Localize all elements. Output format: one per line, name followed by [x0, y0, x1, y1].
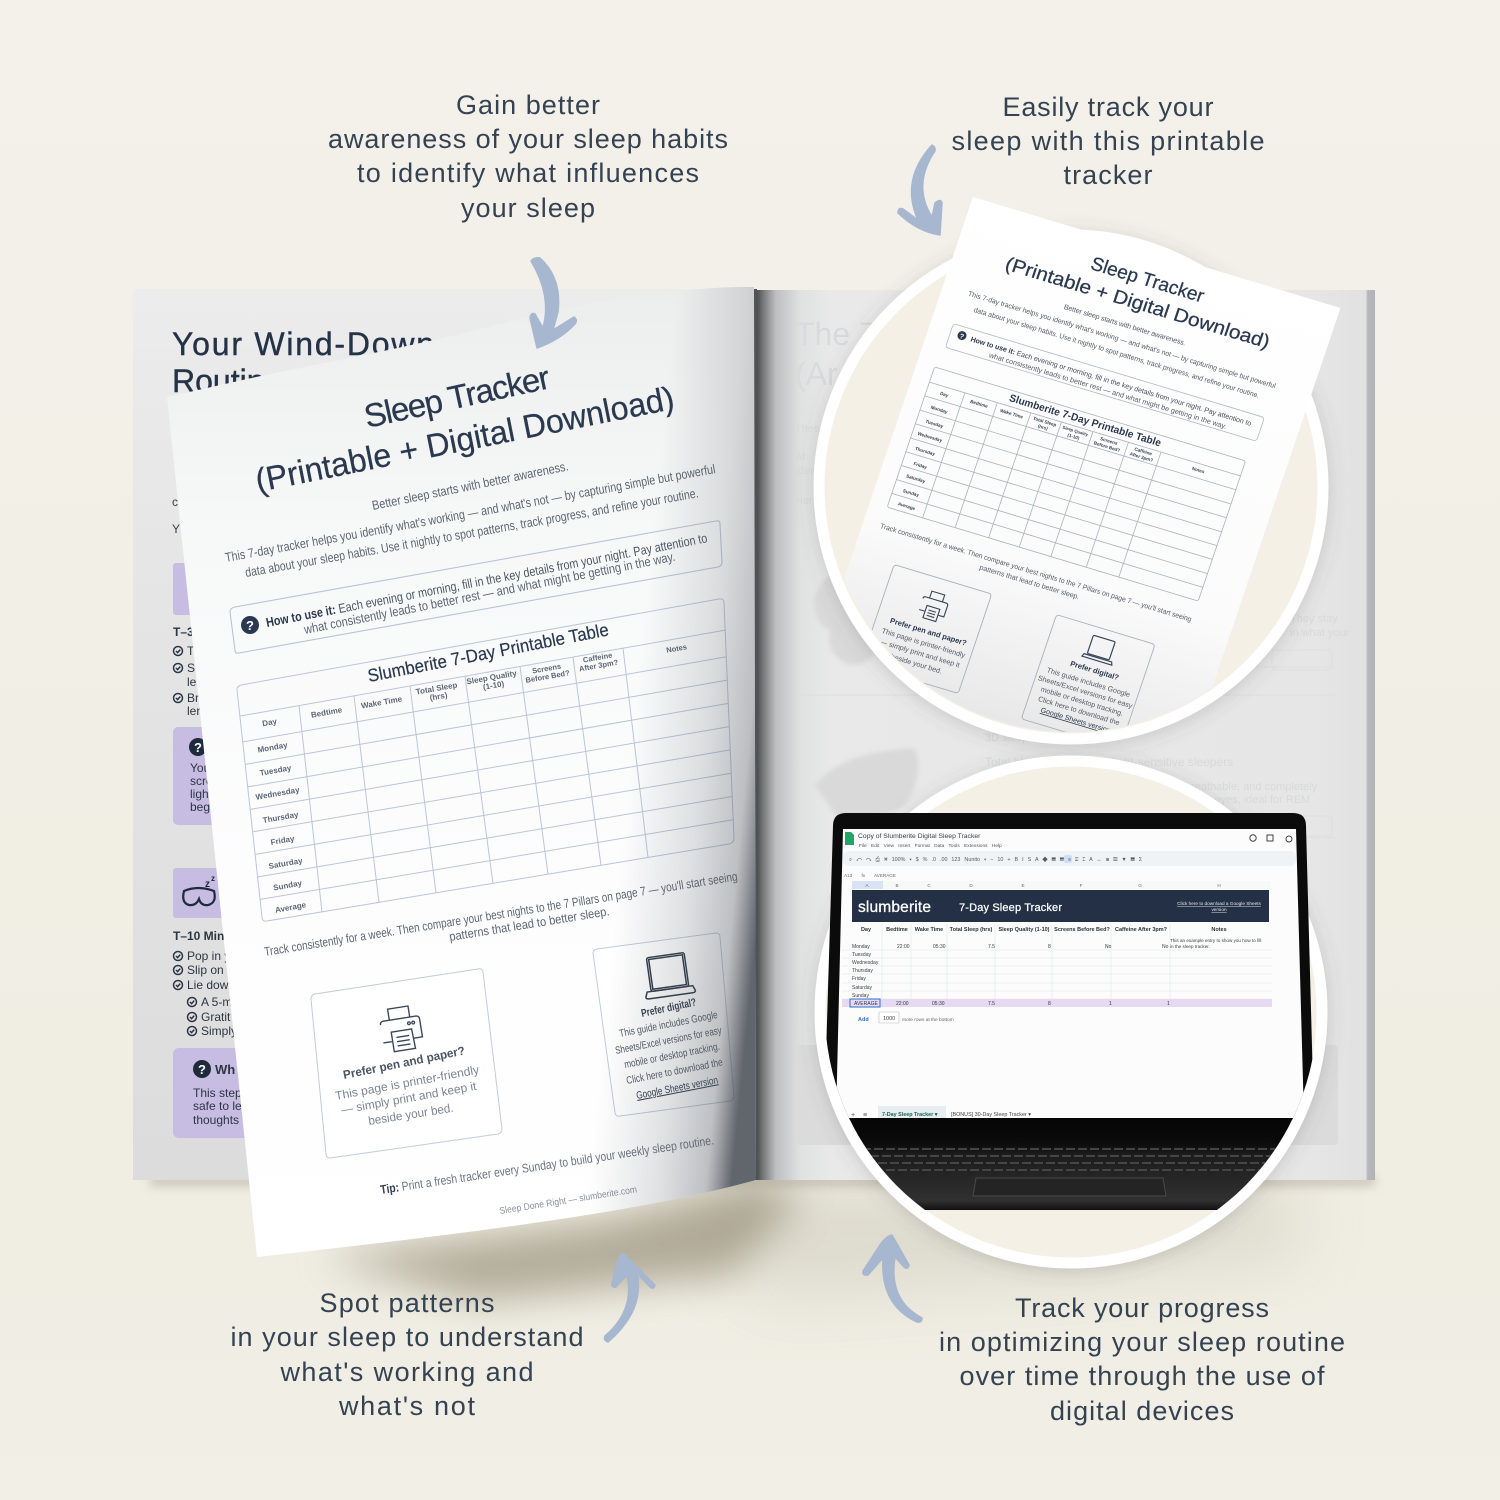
small card: pen and paper: Prefer pen and paper? — [889, 616, 968, 648]
header row: Total Sleep (hrs) — [950, 927, 993, 933]
sheet rows: 7.5 — [988, 944, 995, 950]
title: Sleep Tracker — [361, 358, 553, 435]
sheet rows: 05:30 — [933, 944, 946, 950]
sheet tabs — [851, 1106, 1031, 1119]
small table labels: Before Bed? — [1093, 440, 1121, 453]
row labels: Thursday — [262, 810, 300, 825]
sheet rows: Sunday — [852, 993, 869, 999]
screen — [836, 829, 1304, 1118]
sheet rows: Friday — [852, 976, 866, 982]
faded text: breathable, and completely — [1185, 781, 1318, 793]
title: (Printable + Digital Download) — [252, 379, 677, 499]
small table labels: Monday — [930, 405, 949, 415]
small title: Sleep Tracker — [1088, 254, 1207, 307]
sheet tabs: [BONUS] 30-Day Sleep Tracker ▾ — [951, 1112, 1031, 1118]
checklist T-10: Lie dow — [187, 978, 229, 992]
average row: 05:30 — [932, 1001, 945, 1007]
spreadsheet — [842, 832, 1296, 1119]
card: prefer digital: Prefer digital? — [640, 997, 698, 1020]
caption: bottom left — [230, 1288, 584, 1421]
app title — [845, 832, 1292, 849]
column headers: After 3pm? — [578, 658, 619, 673]
header row: Caffeine After 3pm? — [1115, 927, 1168, 933]
checklist T-30: le — [187, 675, 197, 689]
curled page: large sleep tracker — [167, 287, 756, 1257]
column headers: (hrs) — [429, 691, 448, 703]
page sheet — [167, 287, 756, 1257]
card: prefer digital: mobile or desktop tracking. — [623, 1041, 721, 1071]
how to use box: what consistently leads to better rest — and what might be getting in the way. — [302, 549, 676, 637]
small title: (Printable + Digital Download) — [1002, 254, 1272, 353]
checklist T-10: Gratit — [201, 1010, 231, 1024]
book: right page — [757, 290, 1375, 1180]
add rows — [858, 1012, 954, 1023]
banner: version — [1211, 907, 1227, 912]
row labels — [255, 717, 307, 915]
toolbar: ⌕ ↶ ↷ ⎙ ⌘ 100% ▾ $ % .0 .00 123 Nunito ▾ − 10 + B I S A ◆ ▦ ▤ ≡ ⍗ ⌶ A ↔ ⊞ ▧ ▼ ▦ Σ — [849, 856, 1143, 863]
caption: bottom left: what's not — [338, 1391, 475, 1421]
caption: top left: awareness of your sleep habits — [328, 124, 728, 154]
purple box 4: ? — [198, 1062, 206, 1077]
column headers: E — [1021, 883, 1025, 888]
icon: laptop — [640, 952, 696, 999]
left page heading: Routine — [172, 363, 282, 399]
caption: top left: to identify what influences — [357, 158, 699, 188]
purple box 1 — [173, 563, 303, 615]
purple box 2 — [173, 727, 303, 825]
sheet rows: No — [1105, 944, 1112, 950]
small track text: patterns that lead to better sleep. — [978, 563, 1081, 601]
small card: digital: This guide includes Google — [1046, 665, 1131, 699]
faded text — [795, 423, 1350, 806]
small intro: This 7-day tracker helps you identify what's working — and what's not — by capturing simple but powerful — [967, 289, 1277, 390]
faded text: Thes — [795, 423, 820, 435]
arrow: bottom right — [863, 1235, 922, 1322]
sheet grid — [842, 924, 1272, 1007]
small table labels: Average — [897, 501, 916, 511]
book shadow — [150, 1176, 1375, 1300]
column headers: Caffeine — [582, 651, 613, 665]
small table labels: Saturday — [906, 474, 926, 484]
average row: 1 — [1109, 1001, 1112, 1007]
row labels: Saturday — [268, 856, 304, 871]
purple box 2: beg — [190, 800, 210, 814]
table grid — [237, 599, 734, 921]
small intro: data about your sleep habits. Use it nightly to spot patterns, track progress, and refine your routine. — [973, 305, 1261, 400]
small table labels: After 3pm? — [1129, 451, 1154, 463]
intro text: data about your sleep habits. Use it nightly to spot patterns, track progress, and refine your routine. — [244, 485, 700, 580]
column headers: Total Sleep — [415, 680, 458, 697]
toolbar — [843, 851, 1296, 866]
small table labels: Thursday — [914, 446, 936, 457]
icon: printer — [378, 1005, 424, 1053]
purple box 3 with sleep mask icon: z — [211, 874, 215, 883]
small table labels: Total Sleep — [1032, 416, 1057, 428]
column headers: Wake Time — [360, 694, 403, 711]
column headers: Bedtime — [310, 705, 343, 720]
average row: 8 — [1048, 1001, 1051, 1007]
sheet tabs: 7-Day Sleep Tracker ▾ — [882, 1112, 938, 1118]
small card: pen and paper: — simply print and keep it — [879, 637, 961, 669]
small table labels: (1-10) — [1067, 432, 1081, 441]
faded text: They stay — [1290, 613, 1338, 625]
add rows: 1000 — [883, 1016, 895, 1022]
row labels: Friday — [270, 834, 296, 847]
track consistently text: Track consistently for a week. Then compare your best nights to the 7 Pillars on page 7 — you'll start seeing — [263, 869, 738, 959]
column headers: H — [1217, 883, 1221, 888]
small table labels: (hrs) — [1037, 423, 1049, 431]
checklist T-30: Br — [187, 691, 199, 705]
small card: digital: Click here to download the — [1037, 694, 1121, 727]
small card: digital: Prefer digital? — [1069, 659, 1121, 682]
card: prefer pen and paper: — simply print and keep it — [340, 1079, 478, 1117]
small table labels: Day — [939, 391, 950, 398]
row labels: Wednesday — [255, 785, 301, 802]
banner: Click here to download a Google Sheets — [1177, 901, 1261, 906]
header row: Wake Time — [915, 927, 943, 933]
checklist T-30: T — [187, 644, 195, 658]
average row: 1 — [1167, 1001, 1170, 1007]
track consistently text — [263, 869, 738, 959]
checklist T-10: A 5-m — [201, 995, 232, 1009]
column headers: F — [1080, 883, 1083, 888]
sheet rows: No — [1162, 944, 1169, 950]
row labels: Monday — [257, 740, 289, 755]
small table labels: Sleep Quality — [1062, 425, 1090, 437]
circle base — [819, 235, 1323, 739]
sheet rows: Tuesday — [852, 952, 871, 958]
arrow: bottom left — [604, 1253, 655, 1342]
sheet rows: Wednesday — [852, 960, 879, 966]
table title: Slumberite 7-Day Printable Table — [366, 620, 610, 686]
arrow: top left — [530, 258, 576, 348]
checklist T-30: ler — [187, 704, 200, 718]
sheet tabs: + ≡ — [851, 1112, 867, 1119]
checklist T-10: Slip on — [187, 963, 224, 977]
column headers: Before Bed? — [525, 668, 571, 685]
card: prefer pen and paper: This page is printer-friendly — [334, 1063, 480, 1103]
card: prefer digital: Click here to download the — [625, 1056, 724, 1087]
average row: 7.5 — [988, 1001, 995, 1007]
page footer: Sleep Done Right — slumberite.com — [499, 1184, 638, 1217]
small table labels: Caffeine — [1134, 446, 1153, 457]
purple box 4 — [173, 1048, 303, 1138]
printable table — [237, 599, 734, 921]
purple box 3 with sleep mask icon — [173, 868, 303, 918]
book: left page — [133, 289, 757, 1180]
column headers — [310, 642, 688, 720]
circle 1: printable tracker zoom — [808, 197, 1340, 754]
checklist T-30: T–3 — [173, 625, 194, 639]
spine line — [753, 289, 757, 1180]
small table — [887, 367, 1246, 601]
how to use box: ? — [246, 618, 254, 633]
purple box 4: thoughts — [193, 1113, 239, 1127]
checklist T-10: Pop in y — [187, 949, 230, 963]
sheet rows: Saturday — [852, 985, 873, 991]
small card: pen and paper: This page is printer-friendly — [881, 626, 967, 660]
sheet rows — [852, 938, 1261, 999]
caption: top right: Easily track your — [1002, 92, 1214, 122]
faded text: 3D sleep — [985, 732, 1028, 744]
small card: pen and paper — [861, 565, 992, 693]
checklist T-10 — [173, 929, 237, 1038]
left page heading: Your Wind-Down — [172, 326, 434, 362]
faded text: At — [795, 451, 805, 463]
row labels: Tuesday — [259, 763, 293, 778]
header row — [861, 927, 1226, 932]
small card: digital: mobile or desktop tracking. — [1040, 684, 1125, 718]
header row: Notes — [1211, 927, 1227, 933]
sheet rows: 8 — [1048, 944, 1051, 950]
checklist T-10: T–10 Min — [173, 929, 224, 943]
column headers: G — [1138, 883, 1142, 888]
faded heading: (Ar — [795, 356, 838, 392]
card: prefer digital: Google Sheets version — [635, 1074, 719, 1102]
card: prefer pen and paper: beside your bed. — [367, 1101, 454, 1128]
row labels: Sunday — [273, 879, 303, 892]
faded heading — [795, 316, 877, 392]
caption: bottom left: in your sleep to understand — [230, 1322, 584, 1352]
column headers: B — [895, 883, 899, 888]
small table labels: Wednesday — [917, 431, 943, 443]
small table labels — [898, 392, 1204, 510]
column headers: D — [969, 883, 973, 888]
faded text: Total blackout, travel or light-sensitive sleepers — [985, 755, 1233, 769]
laptop — [826, 813, 1312, 1210]
small card: digital: Google Sheets version — [1039, 705, 1112, 735]
arrow: top right — [898, 145, 942, 235]
header row: Sleep Quality (1-10) — [998, 927, 1050, 933]
purple box 2: scre — [190, 774, 213, 788]
caption: top right: sleep with this printable — [952, 126, 1264, 156]
caption: bottom left: what's working and — [280, 1357, 534, 1387]
column headers: Sleep Quality — [466, 669, 518, 686]
add rows: more rows at the bottom — [902, 1017, 954, 1023]
left page intro fragments: Y — [172, 522, 180, 536]
small intro: Better sleep starts with better awareness. — [1063, 302, 1187, 347]
small table labels: Sunday — [902, 488, 920, 498]
how to use box: How to use it: Each evening or morning, fill in the key details from your night. Pay attention to — [265, 530, 708, 630]
small how to box: ? — [958, 333, 965, 341]
sheet rows: in the sleep tracker. — [1170, 944, 1210, 949]
caption: top right: tracker — [1064, 160, 1152, 190]
small table labels: Friday — [913, 461, 928, 470]
caption: bottom right: in optimizing your sleep routine — [939, 1327, 1345, 1357]
caption: bottom right: digital devices — [1050, 1396, 1234, 1426]
small card: digital: Sheets/Excel versions for easy — [1037, 673, 1134, 710]
banner — [852, 890, 1269, 922]
purple box 4: safe to le — [193, 1099, 242, 1113]
small table labels: Bedtime — [970, 399, 989, 409]
formula bar: A13 fx AVERAGE — [844, 873, 896, 878]
sheet rows: 22:00 — [897, 944, 910, 950]
small card: digital — [1022, 614, 1155, 732]
left page heading — [172, 326, 434, 399]
faded buttons and rules — [795, 650, 1335, 838]
card: prefer digital: Sheets/Excel versions for easy — [614, 1024, 723, 1057]
faded heading: The 7 — [795, 316, 877, 352]
caption: top left — [328, 90, 728, 223]
small track text: Track consistently for a week. Then compare your best nights to the 7 Pillars on page 7 — you'll start seeing — [879, 521, 1193, 624]
purple box 2: ligh — [190, 787, 209, 801]
track consistently text: patterns that lead to better sleep. — [448, 904, 610, 944]
checklist T-10: Simply — [201, 1024, 237, 1038]
card: prefer pen and paper: Prefer pen and paper? — [342, 1043, 466, 1082]
small how to box: what consistently leads to better rest — and what might be getting in the way. — [987, 350, 1228, 431]
card: prefer pen and paper — [311, 969, 502, 1158]
row labels: Day — [262, 717, 278, 728]
purple box 3 with sleep mask icon: z — [205, 879, 210, 890]
faded text: in what your — [1290, 627, 1350, 639]
app title: Copy of Slumberite Digital Sleep Tracker — [858, 833, 981, 840]
purple box 4: This step — [193, 1086, 242, 1100]
purple box 4: Wh — [215, 1062, 235, 1077]
intro text: Better sleep starts with better awareness. — [371, 458, 570, 513]
average row: 22:00 — [896, 1001, 909, 1007]
header row: Day — [861, 927, 872, 933]
banner: slumberite — [858, 899, 931, 916]
circle base — [820, 761, 1322, 1263]
sheet rows: This an example entry to show you how to fill — [1170, 938, 1261, 943]
row labels: Average — [274, 900, 307, 915]
left page intro fragments: c — [172, 495, 178, 509]
laptop body — [824, 813, 1314, 1120]
column headers: Notes — [666, 642, 688, 655]
faded text: sleep eyes, ideal for REM — [1185, 794, 1310, 806]
column headers: C — [927, 883, 931, 888]
keyboard base — [849, 1118, 1293, 1210]
column headers: Screens — [531, 662, 562, 676]
faded text: Ider — [795, 465, 814, 477]
average row: AVERAGE — [854, 1001, 878, 1007]
caption: top left: Gain better — [456, 90, 600, 120]
small table labels: Tuesday — [925, 419, 944, 429]
app title: File Edit View Insert Format Data Tools Extensions Help — [859, 843, 1002, 849]
small table labels: Screens — [1100, 436, 1119, 446]
small table labels: Wake Time — [999, 408, 1024, 420]
caption: bottom right: Track your progress — [1015, 1293, 1269, 1323]
header row: Screens Before Bed? — [1054, 927, 1110, 933]
caption: bottom right: over time through the use of — [960, 1361, 1325, 1391]
caption: top right — [952, 92, 1264, 190]
faded text: Her — [795, 495, 813, 507]
sheet rows: Thursday — [852, 968, 873, 974]
small how to box: How to use it: Each evening or morning, fill in the key details from your night. Pay attention to — [970, 335, 1253, 428]
checklist T-30: S — [187, 661, 195, 675]
card: prefer digital — [593, 933, 734, 1116]
faded panel — [795, 1045, 1338, 1145]
intro text: This 7-day tracker helps you identify what's working — and what's not — by capturing simple but powerful — [224, 461, 717, 565]
sheet rows: Monday — [852, 944, 870, 950]
small table title: Slumberite 7-Day Printable Table — [1008, 393, 1162, 449]
small table labels: Notes — [1191, 466, 1205, 474]
left page intro fragments — [172, 495, 180, 536]
caption: bottom left: Spot patterns — [320, 1288, 494, 1318]
column headers — [852, 881, 1220, 889]
average row — [842, 999, 1272, 1007]
purple box 2: You — [190, 761, 210, 775]
spine shading — [167, 287, 756, 1257]
caption: bottom right — [939, 1293, 1345, 1426]
purple box 2: ? — [194, 740, 202, 755]
banner: 7-Day Sleep Tracker — [959, 902, 1062, 914]
add rows: Add — [858, 1017, 869, 1023]
tip: Tip: Print a fresh tracker every Sunday to build your weekly sleep routine. — [379, 1133, 715, 1197]
header row: Bedtime — [886, 927, 908, 933]
circle 2: digital tracker on laptop — [790, 761, 1350, 1263]
card: prefer digital: This guide includes Google — [618, 1009, 719, 1040]
checklist T-30 — [173, 625, 200, 718]
how to use box — [230, 521, 722, 653]
caption: top left: your sleep — [461, 193, 595, 223]
column headers: A — [865, 883, 869, 888]
faded mask silhouettes — [813, 572, 918, 818]
small card: pen and paper: beside your bed. — [890, 652, 943, 676]
tilted tracker sheet — [844, 197, 1340, 732]
column headers: (1-10) — [482, 679, 505, 692]
